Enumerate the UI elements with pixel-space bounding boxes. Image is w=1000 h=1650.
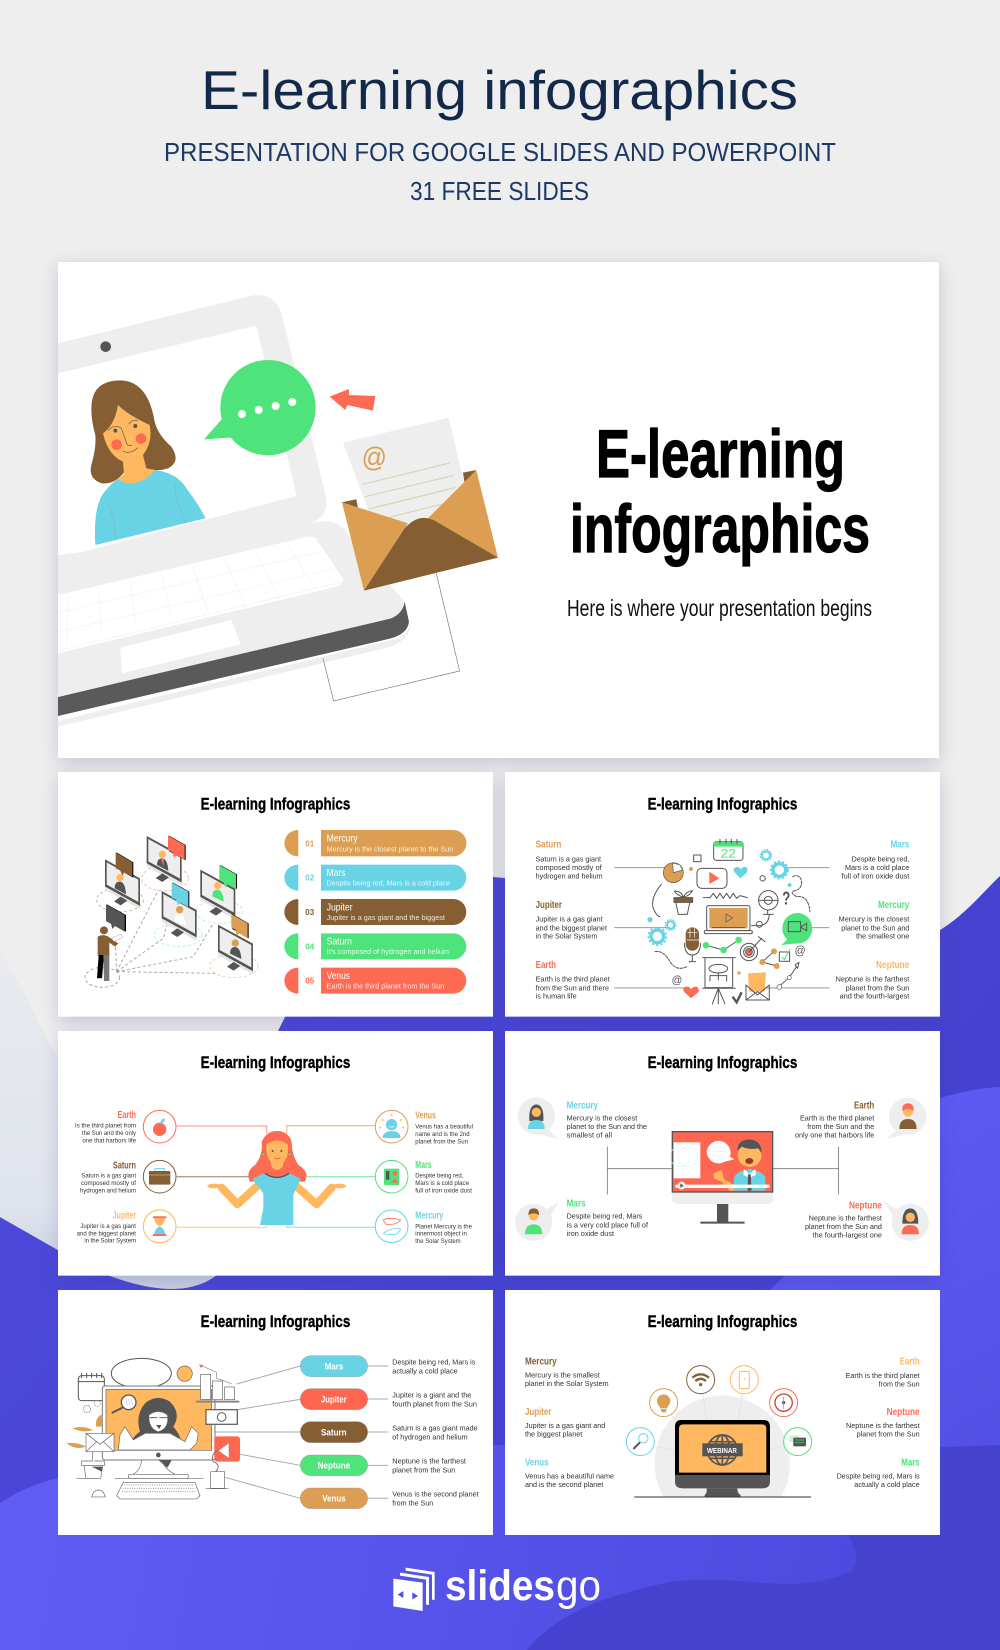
icon: envelope orange: [746, 972, 769, 1000]
icon: question mark: ?: [782, 887, 790, 908]
icon: laptop screen: [58, 295, 327, 587]
row Mars: 02: [305, 873, 315, 883]
text Neptune: planet from the Sun and: [805, 1224, 882, 1231]
right text blocks: planet from the Sun: [415, 1138, 468, 1145]
left text blocks: the Sun and the only: [82, 1130, 137, 1137]
left text blocks: in the Solar System: [536, 934, 598, 941]
icon: plant: [674, 891, 693, 914]
cover title: [570, 416, 870, 567]
wordmark: go: [556, 1562, 601, 1610]
icon: at sign: @: [795, 943, 806, 957]
left text blocks: and the biggest planet: [536, 925, 607, 932]
icon: check: [733, 992, 742, 1002]
row Mercury: 01: [305, 838, 315, 848]
text Mars: Mars: [567, 1199, 586, 1210]
left text blocks: [525, 1356, 614, 1489]
left text blocks: Saturn is a gas giant: [536, 857, 601, 864]
left text blocks: Is the third planet from: [75, 1123, 136, 1130]
icon: compass: [770, 1389, 798, 1417]
left text blocks: Earth: [536, 960, 556, 971]
panel: slide 5 pills: [58, 1290, 493, 1535]
pill descriptions: Neptune is the farthest: [392, 1459, 466, 1466]
icon: laptop video: [704, 906, 752, 934]
pill descriptions: from the Sun: [392, 1500, 433, 1507]
text Neptune: Neptune: [849, 1200, 882, 1211]
right text blocks: Despite being red, Mars is: [837, 1473, 920, 1480]
pill Jupiter: [300, 1389, 368, 1410]
pill descriptions: [392, 1360, 479, 1507]
icon: desk illustration: [67, 1358, 240, 1499]
icon: wifi: [687, 1366, 715, 1394]
icon: heart red: [683, 987, 699, 998]
right text blocks: actually a cold place: [854, 1482, 920, 1489]
right text blocks: Mercury: [878, 900, 910, 911]
icon: wave: [703, 893, 747, 898]
pill Neptune: Neptune: [318, 1461, 350, 1471]
pill descriptions: fourth planet from the Sun: [392, 1401, 477, 1408]
icon: astronaut: [375, 1110, 408, 1143]
cover title: E-learning: [596, 416, 845, 492]
avatar Neptune: [884, 1202, 929, 1241]
pill Jupiter: Jupiter: [321, 1395, 347, 1405]
isometric monitors illustration: [85, 836, 258, 987]
left text blocks: Earth: [118, 1110, 136, 1121]
icon: video play: [697, 868, 727, 888]
left text blocks: Saturn is a gas giant: [81, 1173, 136, 1180]
panel: slide 3 woman: [58, 1031, 493, 1276]
panel: slide 2 icon cloud: [505, 772, 940, 1017]
left text blocks: Venus: [525, 1457, 549, 1468]
icon: slides stack: [393, 1568, 435, 1611]
left text blocks: Mercury: [525, 1356, 557, 1367]
right text blocks: Mercury: [415, 1211, 444, 1222]
pill descriptions: Jupiter is a giant and the: [392, 1393, 471, 1400]
text Mars: Despite being red, Mars: [567, 1214, 643, 1221]
right text blocks: Earth: [900, 1356, 920, 1367]
left text blocks: in the Solar System: [84, 1238, 136, 1245]
left text blocks: Earth is the third planet: [536, 977, 610, 984]
row Venus: [284, 968, 466, 994]
right text blocks: Neptune is the farthest: [836, 977, 909, 984]
row Mars: Mars: [327, 868, 345, 879]
icon: calendar: 22: [721, 847, 736, 861]
right text blocks: Despite being red,: [415, 1173, 464, 1180]
bracket lines: [607, 1147, 839, 1194]
right text blocks: Neptune: [876, 960, 910, 971]
icon: phone: [730, 1366, 758, 1394]
right text blocks: Planet Mercury is the: [415, 1223, 472, 1230]
pill descriptions: planet from the Sun: [392, 1467, 455, 1474]
icon: speech bubble: [204, 360, 316, 455]
connector lines: [614, 868, 829, 988]
right text blocks: full of iron oxide dust: [842, 874, 909, 881]
left text blocks: Saturn: [536, 840, 561, 851]
icon: whiteboard: [703, 958, 735, 1004]
text Mercury: [567, 1100, 647, 1140]
right text blocks: full of iron oxide dust: [415, 1187, 472, 1194]
right text blocks: the Solar System: [415, 1238, 461, 1245]
left text blocks: and the biggest planet: [77, 1230, 136, 1237]
left text blocks: is human life: [536, 994, 577, 1001]
pill descriptions: Saturn is a gas giant made: [392, 1426, 478, 1433]
text Earth: Earth is the third planet: [800, 1115, 874, 1122]
right text blocks: Mars: [415, 1160, 432, 1171]
left text blocks: Saturn: [113, 1160, 136, 1171]
heading: E-learning Infographics: [648, 794, 797, 813]
icon: arrow path: [653, 884, 799, 986]
left text blocks: Jupiter is a gas giant: [536, 917, 603, 924]
left text blocks: [536, 840, 610, 1001]
text Neptune: the fourth-largest one: [813, 1233, 882, 1240]
panel: slide 1 numbered list: [58, 772, 493, 1017]
left text blocks: Jupiter is a gas giant: [80, 1223, 136, 1230]
cover subtitle: Here is where your presentation begins: [567, 595, 872, 621]
pill Venus: Venus: [322, 1494, 346, 1504]
left text blocks: [75, 1110, 137, 1245]
text Earth: only one that harbors life: [795, 1133, 874, 1140]
right text blocks: [836, 840, 910, 1001]
right text blocks: planet from the Sun: [846, 985, 909, 992]
icon: heart blue: [734, 867, 747, 878]
right text blocks: planet from the Sun: [857, 1432, 920, 1439]
icon: speech leaves: [375, 1210, 408, 1243]
row Mars: [284, 865, 466, 891]
text Earth: Earth: [854, 1100, 874, 1111]
pill Saturn: Saturn: [321, 1428, 347, 1438]
avatar Mars: [515, 1202, 559, 1241]
right text blocks: [415, 1111, 473, 1245]
icon: orange network: [759, 948, 780, 969]
left text blocks: hydrogen and helium: [536, 874, 603, 881]
pill descriptions: of hydrogen and helium: [392, 1434, 468, 1441]
pill Mars: Mars: [325, 1362, 343, 1372]
avatar Earth: [887, 1098, 926, 1139]
right text blocks: Mars: [891, 840, 910, 851]
connector spokes: [654, 1393, 784, 1451]
pill Mars: [300, 1356, 368, 1377]
text Mercury: Mercury is the closest: [567, 1115, 637, 1122]
heading: E-learning Infographics: [648, 1312, 797, 1331]
heading: E-learning Infographics: [648, 1053, 797, 1072]
text Mars: iron oxide dust: [567, 1231, 614, 1238]
right text blocks: and the fourth-largest: [840, 994, 909, 1001]
laptop and email illustration: [58, 295, 498, 727]
heading: E-learning Infographics: [201, 1053, 350, 1072]
right text blocks: Mars: [901, 1457, 920, 1468]
right text blocks: the smallest one: [856, 934, 909, 941]
wordmark: slides: [445, 1562, 555, 1610]
cover title: infographics: [570, 491, 870, 567]
left text blocks: Jupiter: [525, 1407, 551, 1418]
row Mercury: [284, 830, 466, 856]
icon: webcam: [752, 891, 778, 927]
icon: webinar monitor: [675, 1420, 770, 1497]
row Venus: Venus: [327, 971, 350, 982]
left text blocks: and is the second planet: [525, 1482, 603, 1489]
icon: laptop base: [58, 521, 410, 727]
icon: light bulb: [650, 1389, 678, 1417]
pill descriptions: Despite being red, Mars is: [392, 1360, 476, 1367]
heading: E-learning Infographics: [201, 794, 350, 813]
pill Venus: [300, 1488, 368, 1509]
row Mercury: Mercury: [327, 834, 358, 845]
icon: woman on screen: [91, 380, 206, 545]
right text blocks: Neptune: [887, 1407, 920, 1418]
right text blocks: name and is the 2nd: [415, 1131, 470, 1138]
row Saturn: Saturn: [327, 937, 352, 948]
icon: target: [740, 937, 765, 961]
icon: envelope with letter: @: [362, 442, 387, 473]
icon: apple: [143, 1110, 176, 1143]
icon: camera bubble: [782, 913, 812, 945]
left text blocks: one that harbors life: [82, 1137, 136, 1144]
right text blocks: Venus has a beautiful: [415, 1123, 473, 1130]
row Saturn: It's composed of hydrogen and helium: [327, 949, 449, 956]
left text blocks: planet in the Solar System: [525, 1381, 609, 1388]
row Saturn: [284, 933, 466, 959]
avatar Mercury: [518, 1097, 558, 1139]
icon: magnifier: [626, 1428, 654, 1456]
icon: chat: [784, 1428, 812, 1456]
row Venus: 05: [305, 976, 315, 986]
icon: calendar: [714, 839, 743, 861]
left text blocks: Jupiter: [536, 900, 562, 911]
text Mars: [567, 1199, 648, 1238]
icon: paper outline: [323, 573, 460, 701]
icon: pie chart: [663, 863, 683, 883]
baseline: [634, 1495, 811, 1498]
text Neptune: Neptune is the farthest: [809, 1215, 882, 1222]
pill descriptions: actually a cold place: [392, 1368, 458, 1375]
left text blocks: Mercury is the smallest: [525, 1372, 600, 1379]
left text blocks: the biggest planet: [525, 1432, 582, 1439]
gray dome: [655, 1396, 790, 1497]
left text blocks: Venus has a beautiful name: [525, 1473, 614, 1480]
pill Neptune: [300, 1455, 368, 1476]
right text blocks: Venus: [415, 1111, 436, 1122]
right text blocks: from the Sun: [879, 1382, 920, 1389]
left text blocks: composed mostly of: [536, 865, 602, 872]
panel: slide 4 webinar presenter: [505, 1031, 940, 1276]
left text blocks: from the Sun and there: [536, 985, 609, 992]
text Earth: from the Sun and the: [807, 1124, 874, 1131]
icon: gears blue: [648, 850, 788, 945]
pill Saturn: [300, 1422, 368, 1443]
left text blocks: Jupiter: [113, 1211, 136, 1222]
title: E-learning infographics: [201, 59, 798, 121]
row Jupiter: 03: [305, 907, 315, 917]
slide count: 31 FREE SLIDES: [410, 176, 589, 206]
pill descriptions: Venus is the second planet: [392, 1492, 479, 1499]
text Mercury: smallest of all: [567, 1133, 612, 1140]
right text blocks: planet to the Sun and: [841, 925, 909, 932]
right text blocks: Neptune is the farthest: [846, 1423, 920, 1430]
text Neptune: [805, 1200, 882, 1240]
icon: woman presenter: [207, 1131, 346, 1225]
icon: ABC nodes: [703, 937, 742, 953]
icon cluster: [647, 839, 812, 1004]
text Earth: [795, 1100, 874, 1140]
icon cluster: @: [672, 974, 682, 986]
row Venus: Earth is the third planet from the Sun: [327, 983, 444, 990]
icon: hourglass: [143, 1210, 176, 1243]
list rows: [284, 830, 466, 994]
row Jupiter: [284, 899, 466, 925]
icon: briefcase: [143, 1160, 176, 1193]
left text blocks: composed mostly of: [81, 1180, 136, 1187]
icon: microphone: [684, 927, 701, 962]
left text blocks: hydrogen and helium: [80, 1187, 136, 1194]
row Saturn: 04: [305, 941, 315, 951]
icon: monitor presenter: [670, 1132, 773, 1224]
logo: slidesgo: [393, 1562, 601, 1611]
subtitle: PRESENTATION FOR GOOGLE SLIDES AND POWERPOINT: [164, 137, 836, 167]
icon: check box: [779, 949, 790, 961]
right text blocks: Mars is a cold place: [415, 1180, 469, 1187]
panel: slide 6 webinar: [505, 1290, 940, 1535]
connectors: [215, 1366, 388, 1498]
icon: webinar monitor: WEBINAR: [707, 1446, 738, 1455]
row Jupiter: Jupiter is a gas giant and the biggest: [327, 915, 445, 922]
right text blocks: Mars is a cold place: [845, 865, 909, 872]
row Mars: Despite being red, Mars is a cold place: [327, 881, 450, 888]
left text blocks: Jupiter is a gas giant and: [525, 1423, 605, 1430]
right text blocks: innermost object in: [415, 1231, 467, 1238]
text Mercury: Mercury: [567, 1100, 598, 1111]
right text blocks: Earth is the third planet: [846, 1373, 920, 1380]
panel: main cover slide: [58, 262, 939, 758]
connectors: [177, 1126, 375, 1227]
text Mars: is a very cold place full of: [567, 1222, 648, 1229]
right text blocks: Despite being red,: [852, 857, 909, 864]
row Mercury: Mercury is the closest planet to the Sun: [327, 846, 453, 853]
heading: E-learning Infographics: [201, 1312, 350, 1331]
row Jupiter: Jupiter: [327, 902, 353, 913]
icon: envelope with letter: [342, 418, 498, 591]
text Mercury: planet to the Sun and the: [567, 1124, 647, 1131]
right text blocks: Mercury is the closest: [839, 917, 909, 924]
icon: shapes board: [375, 1160, 408, 1193]
arrow: [330, 389, 375, 411]
right text blocks: [837, 1356, 920, 1489]
